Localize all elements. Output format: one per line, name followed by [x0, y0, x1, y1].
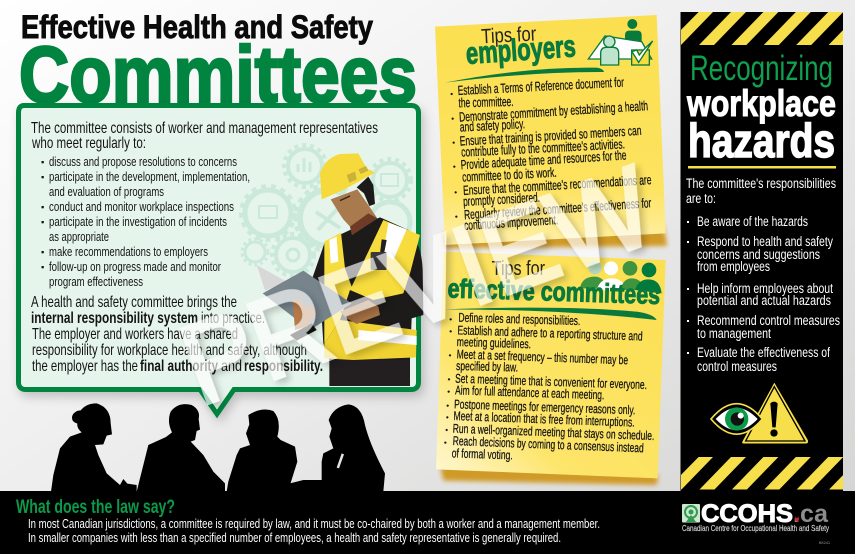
list: committee tips	[444, 311, 655, 462]
panel: committee speech bubble	[18, 106, 423, 414]
internal responsibility paragraph: internal responsibility system	[31, 310, 198, 327]
list of committee duties: as appropriate	[49, 229, 109, 244]
list: employer tips: Establish a Terms of Reference document for	[457, 75, 625, 98]
list: employer tips: Demonstrate commitment by establishing a health	[459, 98, 648, 125]
list of committee duties: make recommendations to employers	[49, 244, 208, 259]
heading: tips for employers: Tips for	[481, 22, 537, 48]
silhouettes of four committee members	[51, 403, 385, 492]
title: Committees	[19, 30, 417, 119]
list: committee tips: Establish and adhere to a reporting structure and	[457, 323, 643, 343]
list: committee tips: specified by law.	[456, 359, 518, 375]
list of committee duties: participate in the development, implementation,	[49, 169, 250, 184]
panel: recognizing workplace hazards	[680, 12, 843, 491]
list: committee tips: Run a well-organized meeting that stays on schedule.	[453, 422, 655, 443]
list of committee duties: participate in the investigation of incidents	[49, 214, 227, 229]
list: employer tips: Ensure that training is provided so members can	[459, 123, 642, 149]
CCOHS logo: .ca	[793, 500, 829, 528]
heading: tips for effective committees: effective committees	[447, 273, 661, 310]
law text	[28, 517, 600, 545]
list: committee tips: Reach decisions by coming to a consensus instead	[453, 434, 644, 455]
illustration: gears	[241, 145, 411, 276]
heading: tips for employers	[445, 22, 604, 83]
illustration: worker in hard hat and safety vest	[257, 153, 423, 386]
CCOHS logo: CCOHS	[701, 500, 793, 528]
icon: meeting table with check mark	[588, 19, 653, 65]
list: committee tips: of formal voting.	[452, 446, 513, 462]
list: committee tips: Aim for full attendance at each meeting.	[455, 383, 605, 402]
list of committee duties	[42, 154, 250, 289]
list: employer tips: Regularly review the committee's effectiveness for	[464, 195, 652, 222]
internal responsibility paragraph: into practice.	[201, 310, 265, 327]
internal responsibility paragraph: A health and safety committee brings the	[31, 294, 237, 311]
list: employer tips: Provide adequate time and resources for the	[460, 148, 627, 172]
internal responsibility paragraph: final authority	[140, 358, 218, 375]
list of committee duties: program effectiveness	[49, 274, 143, 289]
list: employer tips: committee to do its work.	[462, 165, 557, 185]
title: Effective Health and Safety	[21, 9, 373, 45]
responsibilities text: Be aware of the hazards	[697, 214, 808, 229]
hazard stripes: top	[681, 12, 843, 45]
list: committee tips: Define roles and responsibilities.	[458, 311, 581, 328]
CCOHS logo: BK241	[819, 540, 831, 545]
internal responsibility paragraph: and	[221, 358, 242, 375]
responsibilities text: to management	[697, 326, 771, 341]
icon: eye and warning triangle	[711, 382, 809, 444]
list: employer tips: promptly considered.	[463, 190, 540, 209]
heading: tips for effective committees	[445, 257, 661, 320]
internal responsibility paragraph: the employer has the	[32, 358, 138, 375]
list: committee tips: meeting guidelines.	[457, 335, 531, 351]
list: employer tips: Ensure that the committee's recommendations are	[463, 172, 652, 198]
responsibilities text	[686, 176, 840, 374]
intro text: The committee consists of worker and management representatives	[31, 120, 378, 137]
heading: recognizing workplace hazards	[686, 49, 836, 168]
watermark: PREVIEW: PREVIEW	[165, 142, 669, 429]
list of committee duties: discuss and propose resolutions to concerns	[49, 154, 237, 169]
heading: tips for effective committees: Tips for	[492, 257, 545, 280]
note: tips for employers	[435, 15, 667, 248]
list: committee tips: Meet at a location that is free from interruptions.	[453, 409, 635, 430]
internal responsibility paragraph: responsibility for workplace health and safety, although	[32, 342, 307, 359]
note: tips for effective committees	[436, 252, 666, 485]
list: committee tips: Meet at a set frequency – this number may be	[457, 347, 628, 367]
internal responsibility paragraph: responsibility.	[244, 358, 323, 375]
intro text: who meet regularly to:	[31, 135, 146, 152]
responsibilities text: concerns and suggestions	[697, 247, 820, 262]
list: committee tips: Set a meeting time that is convenient for everyone.	[455, 372, 647, 392]
list: employer tips: the committee.	[458, 94, 514, 110]
list of committee duties: follow-up on progress made and monitor	[49, 259, 221, 274]
responsibilities text: control measures	[697, 359, 777, 374]
list: employer tips	[451, 75, 652, 233]
law text: In most Canadian jurisdictions, a committee is required by law, and it must be co-chaired by both a worker and a management member.	[28, 517, 600, 531]
list of committee duties: and evaluation of programs	[49, 184, 164, 199]
intro text	[31, 120, 378, 152]
CCOHS logo	[682, 500, 831, 545]
footer bar	[0, 491, 855, 554]
list: employer tips: contribute fully to the committee's activities.	[461, 136, 625, 160]
list: committee tips: Postpone meetings for emergency reasons only.	[454, 397, 636, 417]
list: employer tips: and safety policy.	[459, 116, 525, 135]
heading: what does the law say: What does the law say?	[16, 497, 175, 518]
list of committee duties: conduct and monitor workplace inspections	[49, 199, 234, 214]
internal responsibility paragraph	[31, 294, 323, 375]
responsibilities text: from employees	[697, 259, 770, 274]
heading: tips for employers: employers	[465, 29, 577, 71]
internal responsibility paragraph: The employer and workers have a shared	[32, 326, 238, 343]
law text: In smaller companies with less than a specified number of employees, a health and safety representative is generally required.	[28, 531, 561, 545]
list: employer tips: continuous improvement.	[464, 212, 559, 233]
icon: group of people	[580, 261, 662, 293]
hazard stripes: bottom	[681, 457, 843, 490]
responsibilities text: are to:	[686, 191, 716, 206]
